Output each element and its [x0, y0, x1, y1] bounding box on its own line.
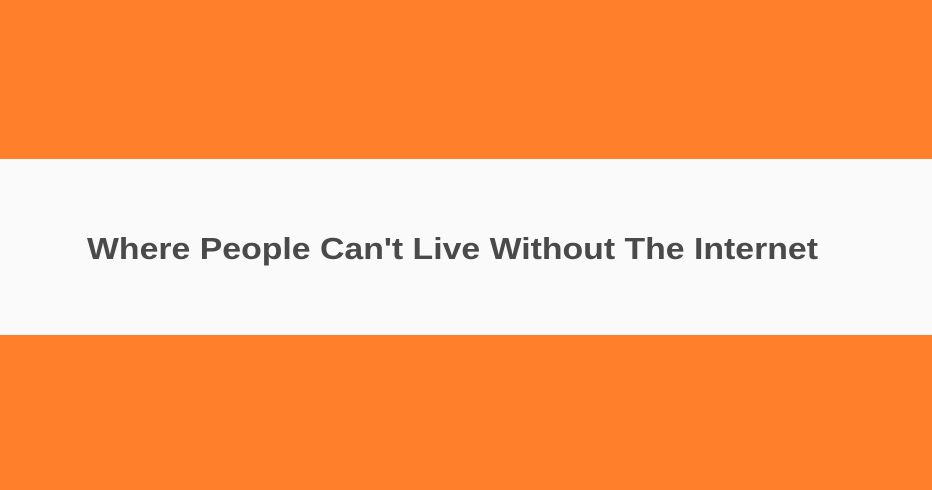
title banner [0, 159, 932, 335]
title: Where People Can't Live Without The Internet [87, 231, 818, 266]
bottom orange band [0, 335, 932, 490]
top orange band [0, 0, 932, 159]
